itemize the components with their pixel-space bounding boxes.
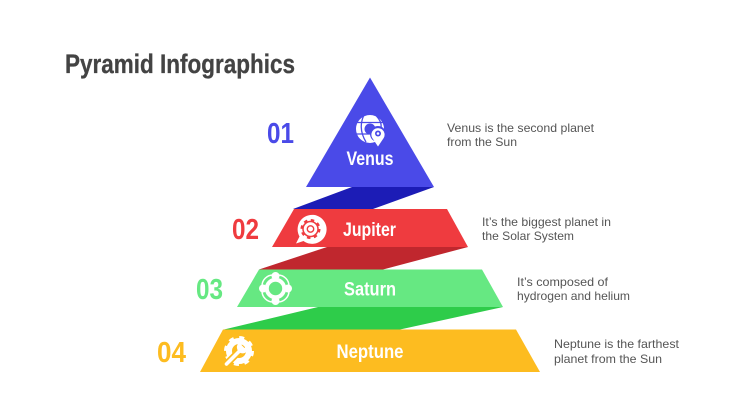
label: Saturn: Saturn [344,280,396,300]
text block: Saturn description: hydrogen and helium [517,289,630,303]
panel: Jupiter tier [272,209,468,247]
text block: Venus description: from the Sun [447,135,517,149]
icon: gear with wrench [226,338,252,364]
connector: Jupiter to Saturn [259,247,468,270]
label: Jupiter: Jupiter [343,220,396,241]
text block: Jupiter description: the Solar System [482,229,574,243]
panel: Neptune tier [200,330,540,372]
number: 04: 04 [157,337,186,369]
tier shape: Venus [306,78,434,187]
tier shape: Saturn [237,270,503,307]
icon: globe with location pin [356,115,386,146]
connector: Venus to Jupiter [293,187,434,209]
text block: Jupiter description [482,215,611,243]
text block: Neptune description: planet from the Sun [554,352,662,366]
number: 01: 01 [267,118,294,150]
label: Neptune: Neptune [336,342,404,363]
icon: gear in speech bubble [296,215,327,244]
text block: Venus description: Venus is the second planet [447,121,595,135]
tier shape: Jupiter [272,209,468,247]
number: 02: 02 [232,214,259,246]
icon: lifebuoy [259,272,292,305]
text block: Saturn description: It’s composed of [517,275,609,289]
label: Venus: Venus [346,149,394,170]
tier shape: Neptune [200,330,540,372]
text block: Venus description [447,121,595,149]
text block: Saturn description [517,275,630,303]
title: Pyramid Infographics [65,49,295,79]
text block: Jupiter description: It’s the biggest planet in [482,215,611,229]
panel: Venus tier [306,78,434,187]
text block: Neptune description [554,337,680,366]
number: 03: 03 [196,274,223,306]
text block: Neptune description: Neptune is the farthest [554,337,680,351]
panel: Saturn tier [237,270,503,307]
connector: Saturn to Neptune [224,307,503,330]
